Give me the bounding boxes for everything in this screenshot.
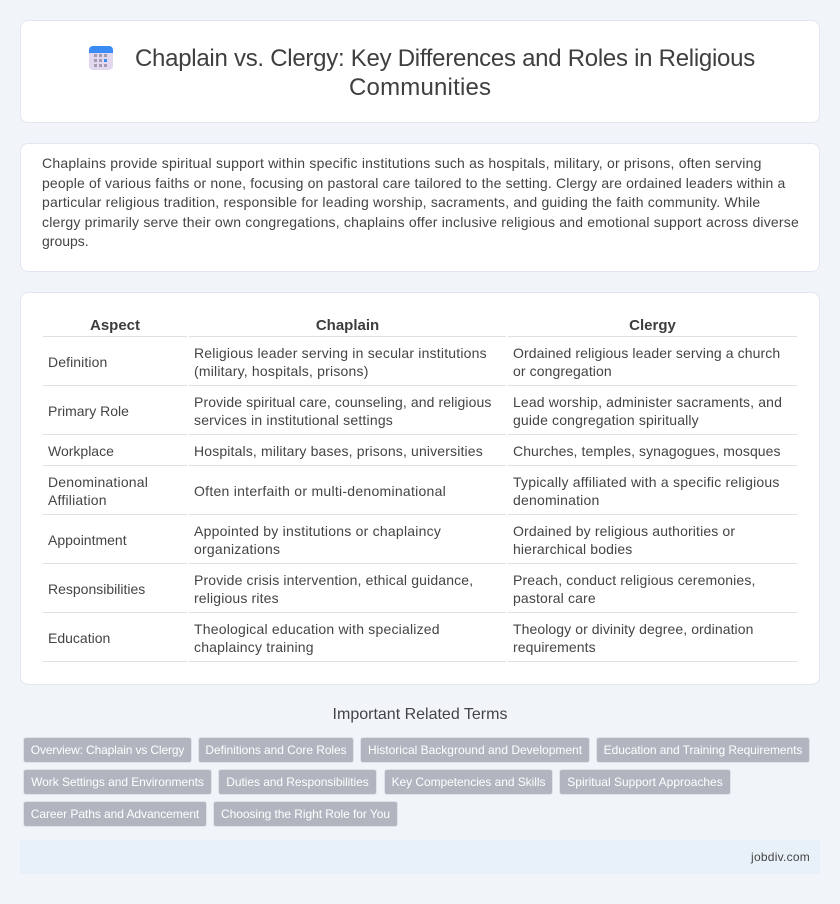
related terms tags: Choosing the Right Role for You	[221, 807, 390, 821]
table rows: Appointment	[48, 532, 127, 548]
title: Communities	[349, 74, 491, 101]
table rows: denomination	[513, 492, 599, 508]
table rows	[43, 336, 797, 662]
table rows: Theological education with specialized	[194, 621, 440, 637]
related terms tags: Definitions and Core Roles	[205, 743, 347, 757]
title: Chaplain vs. Clergy: Key Differences and Roles in Religious	[135, 45, 755, 72]
title	[135, 45, 755, 101]
table rows: Ordained by religious authorities or	[513, 523, 735, 539]
table rows: hierarchical bodies	[513, 541, 632, 557]
table rows: Often interfaith or multi-denominational	[194, 483, 446, 499]
intro text: groups.	[42, 233, 89, 249]
table rows: organizations	[194, 541, 280, 557]
table rows: Provide spiritual care, counseling, and religious	[194, 394, 492, 410]
intro text: people of various faiths or none, focusing on pastoral care tailored to the setting. Clergy are ordained leaders within a	[42, 175, 785, 191]
related terms tags: Spiritual Support Approaches	[567, 775, 723, 789]
column headers: Chaplain	[316, 317, 379, 334]
footer bar	[20, 840, 820, 874]
footer source: jobdiv.com	[751, 850, 810, 864]
related terms tags: Historical Background and Development	[368, 743, 582, 757]
intro text	[42, 155, 799, 249]
column headers: Aspect	[90, 317, 140, 334]
intro text: Chaplains provide spiritual support within specific institutions such as hospitals, military, or prisons, often serving	[42, 155, 762, 171]
table rows: Education	[48, 630, 110, 646]
table rows: (military, hospitals, prisons)	[194, 363, 369, 379]
table rows: Provide crisis intervention, ethical guidance,	[194, 572, 473, 588]
table rows: Preach, conduct religious ceremonies,	[513, 572, 756, 588]
related terms tags: Key Competencies and Skills	[392, 775, 545, 789]
comparison table	[43, 317, 797, 662]
table rows: chaplaincy training	[194, 639, 314, 655]
table rows: Workplace	[48, 443, 114, 459]
table rows: Definition	[48, 354, 107, 370]
panel: comparison table	[20, 292, 820, 685]
column headers: Clergy	[629, 317, 676, 334]
related terms tags: Overview: Chaplain vs Clergy	[31, 743, 184, 757]
header card	[20, 20, 820, 123]
table rows: Responsibilities	[48, 581, 145, 597]
related terms tags: Work Settings and Environments	[31, 775, 204, 789]
related terms heading: Important Related Terms	[333, 706, 507, 723]
table rows: Affiliation	[48, 492, 107, 508]
table rows: pastoral care	[513, 590, 596, 606]
table rows: requirements	[513, 639, 596, 655]
intro text: particular religious tradition, responsible for leading worship, sacraments, and guiding the faith community. While	[42, 194, 760, 210]
table rows: Denominational	[48, 474, 148, 490]
table rows: Appointed by institutions or chaplaincy	[194, 523, 441, 539]
related terms tags: Career Paths and Advancement	[31, 807, 199, 821]
table rows: Ordained religious leader serving a church	[513, 345, 780, 361]
table rows: services in institutional settings	[194, 412, 393, 428]
table rows: or congregation	[513, 363, 612, 379]
icon: calendar	[89, 46, 113, 70]
panel: introduction	[20, 143, 820, 272]
table rows: Typically affiliated with a specific religious	[513, 474, 780, 490]
table rows: Primary Role	[48, 403, 129, 419]
intro text: clergy primarily serve their own congregations, chaplains offer inclusive religious and emotional support across diverse	[42, 214, 799, 230]
table rows: Theology or divinity degree, ordination	[513, 621, 753, 637]
table rows: guide congregation spiritually	[513, 412, 699, 428]
table rows: Lead worship, administer sacraments, and	[513, 394, 782, 410]
related terms tags: Duties and Responsibilities	[226, 775, 369, 789]
table rows: Churches, temples, synagogues, mosques	[513, 443, 781, 459]
table rows: religious rites	[194, 590, 279, 606]
column headers	[90, 317, 676, 334]
related terms tags: Education and Training Requirements	[604, 743, 802, 757]
table rows: Religious leader serving in secular institutions	[194, 345, 487, 361]
related terms tags	[23, 737, 810, 827]
table rows: Hospitals, military bases, prisons, universities	[194, 443, 483, 459]
